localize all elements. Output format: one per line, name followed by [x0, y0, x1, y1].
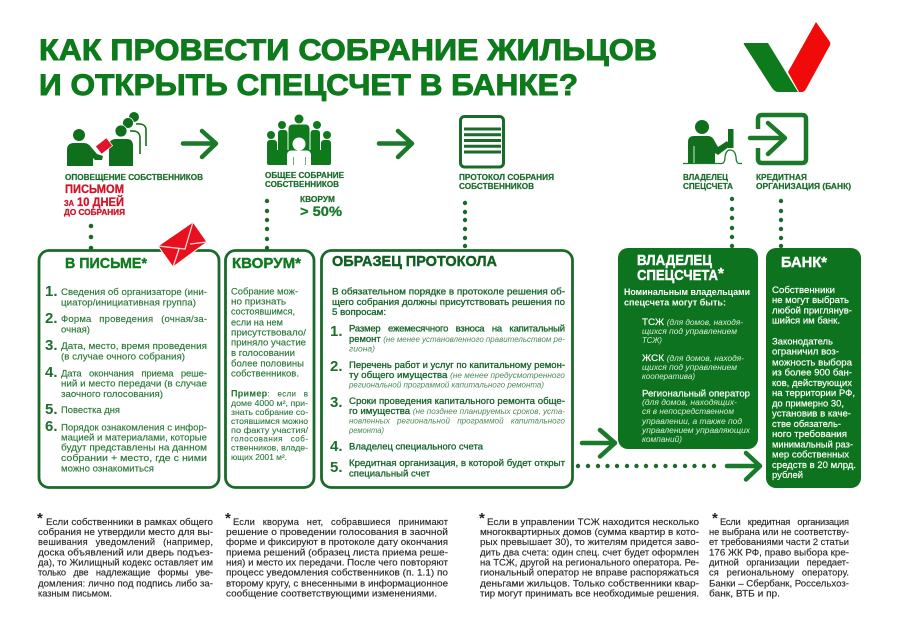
- footnote: account owner: гиональный оператор не вправе распоряжаться: [480, 568, 699, 578]
- footnote: bank: не выбрана или не соответству-: [709, 527, 849, 537]
- label: general meeting: [265, 171, 345, 189]
- list: letter contents: будут представлены на данном: [61, 443, 207, 454]
- footnote: letter: только две надлежащие формы уве-: [38, 568, 213, 578]
- footnote: account owner: Если в управлении ТСЖ находится несколько: [487, 517, 699, 527]
- list: letter contents: 4.: [45, 364, 58, 381]
- panel: account owner: [618, 248, 758, 449]
- text: nominal owners: управлением управляющих: [641, 426, 751, 435]
- list: letter contents: можно ознакомиться: [61, 463, 154, 474]
- icon: protocol document: [460, 116, 504, 167]
- text: bank requirements: можность выбора: [772, 357, 853, 368]
- label: account owner: [683, 173, 733, 191]
- footnote: bank: Банки – Сбербанк, Россельхоз-: [709, 578, 849, 588]
- panel: protocol sample: [322, 250, 572, 488]
- text: nominal owners: ТСЖ): [642, 336, 662, 345]
- text: bank requirements: на территории РФ,: [772, 388, 855, 399]
- heading: account owner: ВЛАДЕЛЕЦ: [637, 252, 712, 269]
- text: quorum rule: более половины: [231, 358, 304, 369]
- list: protocol questions: [330, 323, 566, 480]
- footnote: quorum: сообщение соответствующими изменениями.: [226, 588, 437, 598]
- title: [39, 34, 657, 102]
- text: bank requirements: [772, 285, 856, 481]
- text: nominal owners: (для домов, находящих-: [642, 398, 737, 407]
- label: protocol: [459, 173, 554, 191]
- label: bank: КРЕДИТНАЯ: [756, 173, 807, 182]
- text: nominal owners: кооператива): [642, 372, 695, 381]
- text: bank requirements: установив в каче-: [772, 408, 851, 419]
- label: protocol: ПРОТОКОЛ СОБРАНИЯ: [459, 173, 554, 182]
- footnote: bank: ет требованиями части 2 статьи: [709, 537, 849, 547]
- text: quorum rule: приняло участие: [231, 338, 306, 349]
- title: КАК ПРОВЕСТИ СОБРАНИЕ ЖИЛЬЦОВ: [39, 34, 657, 67]
- label: quorum over 50 percent: > 50%: [300, 203, 343, 219]
- footnote: bank: *: [712, 510, 718, 527]
- list: letter contents: 1.: [45, 283, 58, 300]
- list: protocol questions: 4.: [330, 438, 343, 455]
- list: protocol questions: ремонт (не менее установленного правительством ре-: [349, 334, 565, 345]
- list: letter contents: 3.: [45, 337, 58, 354]
- list: letter contents: Дата, место, время проведения: [61, 341, 207, 352]
- list: letter contents: заочного голосования): [61, 389, 163, 400]
- text: bank requirements: минимальный раз-: [772, 439, 853, 450]
- panel: bank: [766, 248, 861, 488]
- footnote: letter: да), то Жилищный кодекс оставляет им: [38, 557, 213, 567]
- text: bank requirements: до примерно 30,: [772, 398, 844, 409]
- footnote: quorum: приема решений (образец листа приема реше-: [226, 547, 448, 557]
- list: letter contents: циатор/инициативная группа): [61, 297, 196, 308]
- footnote: quorum: ния) и место их передачи. После чего повторяют: [226, 557, 449, 567]
- title: И ОТКРЫТЬ СПЕЦСЧЕТ В БАНКЕ?: [39, 69, 578, 102]
- text: bank requirements: стве обязатель-: [772, 419, 841, 430]
- icon: bank entrance: [750, 115, 806, 163]
- list: protocol questions: 5.: [330, 459, 343, 476]
- heading: account owner: *: [718, 265, 724, 282]
- list: protocol questions: го имущества (не позднее планируемых сроков, уста-: [349, 406, 565, 417]
- list: letter contents: Порядок ознакомления с инфор-: [61, 422, 207, 433]
- heading: protocol sample: ОБРАЗЕЦ ПРОТОКОЛА: [332, 253, 497, 270]
- list: letter contents: Форма проведения (очная/за-: [61, 314, 207, 325]
- label: account owner: ВЛАДЕЛЕЦ: [683, 173, 728, 182]
- list: protocol questions: гиона): [349, 344, 375, 354]
- heading: quorum: КВОРУМ*: [232, 255, 301, 272]
- heading: account owner: [637, 252, 724, 284]
- text: quorum rule: в голосовании: [231, 348, 295, 359]
- label: quorum over 50 percent: [300, 195, 343, 219]
- footnote: quorum: форме и фиксируют в протоколе дату окончания: [226, 537, 448, 547]
- footnote: letter: [37, 510, 213, 598]
- list: protocol questions: ту общего имущества (не менее предусмотренного: [349, 370, 566, 381]
- text: nominal owners: спецсчета могут быть:: [624, 298, 726, 308]
- footnote: quorum: решение о проведении голосования в заочной: [226, 527, 448, 537]
- footnote: bank: банк, ВТБ и пр.: [709, 588, 780, 598]
- label: notifying owners: 10 ДНЕЙ: [77, 196, 124, 209]
- icon: account owner: [683, 120, 742, 164]
- text: quorum example: по факту участия/: [231, 426, 309, 435]
- footnote: quorum: второму кругу, с внесенными в информационное: [226, 578, 448, 588]
- text: quorum example: ственников, владе-: [231, 444, 308, 452]
- text: quorum example: [231, 388, 309, 462]
- footnote: bank: [709, 510, 849, 598]
- list: protocol questions: 3.: [330, 394, 343, 411]
- text: nominal owners: щихся под управлением: [642, 363, 738, 372]
- list: protocol questions: ремонта): [348, 426, 384, 435]
- label: quorum over 50 percent: КВОРУМ: [300, 195, 335, 204]
- footnote: letter: вешивания уведомлений (например,: [38, 537, 213, 547]
- text: nominal owners: управлении, а также под: [641, 417, 743, 426]
- footnote: quorum: *: [225, 510, 231, 527]
- text: bank requirements: любой приглянув-: [772, 306, 852, 317]
- text: bank requirements: из более 900 бан-: [772, 368, 852, 379]
- text: bank requirements: ограничил воз-: [772, 347, 839, 358]
- label: notifying owners: ДО СОБРАНИЯ: [64, 208, 125, 217]
- list: letter contents: 2.: [45, 310, 58, 327]
- text: nominal owners: [624, 287, 751, 444]
- arrow: step 2 to 3: [379, 131, 412, 157]
- list: letter contents: Повестка дня: [61, 405, 120, 416]
- text: nominal owners: компаний): [642, 435, 682, 444]
- text: quorum rule: если на нем: [231, 317, 283, 328]
- footnote: account owner: на ТСЖ, другой на регионального оператора. Ре-: [480, 557, 699, 567]
- footnote: account owner: [479, 510, 699, 598]
- label: general meeting: СОБСТВЕННИКОВ: [265, 180, 339, 189]
- text: protocol intro: 5 вопросам:: [332, 307, 386, 318]
- text: protocol intro: щего собрания должны присутствовать решения по: [332, 297, 565, 308]
- list: letter contents: ний и место передачи (в случае: [61, 379, 207, 390]
- arrow: step 1 to 2: [183, 131, 216, 157]
- text: quorum rule: [231, 287, 306, 380]
- text: nominal owners: ся в непосредственном: [642, 407, 735, 416]
- list: letter contents: [45, 283, 207, 474]
- text: bank requirements: ков, действующих: [772, 378, 852, 389]
- footnote: account owner: деньгами жильцов. Только собственники квар-: [480, 578, 699, 588]
- text: quorum example: Пример: если в: [231, 388, 308, 398]
- arrow: dotted protocol to bank: [576, 453, 760, 480]
- text: quorum rule: присутствовало/: [231, 327, 306, 338]
- text: bank requirements: шийся им банк.: [772, 316, 840, 327]
- list: protocol questions: 2.: [330, 358, 343, 375]
- footnote: letter: собрания не утвердили место для вы-: [38, 527, 213, 537]
- text: bank requirements: мер собственных: [772, 450, 849, 461]
- panel: in the letter: [39, 250, 219, 488]
- text: quorum rule: собственников.: [231, 369, 299, 380]
- footnote: quorum: процесс уведомления собственников (п. 1.1) по: [226, 568, 448, 578]
- footnote: account owner: тир могут принимать все необходимые решения.: [480, 588, 699, 598]
- text: bank requirements: Собственники: [772, 285, 835, 296]
- text: quorum example: голосования соб-: [231, 434, 308, 444]
- list: protocol questions: специальный счет: [349, 468, 431, 480]
- footnote: quorum: Если кворума нет, собравшиеся принимают: [233, 517, 449, 527]
- footnote: account owner: рых превышает 30), то жителям придется заво-: [480, 537, 699, 547]
- text: protocol intro: В обязательном порядке в протоколе решения об-: [332, 286, 565, 298]
- label: notifying owners: [64, 173, 203, 217]
- list: protocol questions: новленных региональной программой капитального: [349, 416, 566, 426]
- text: nominal owners: ТСЖ (для домов, находя-: [642, 317, 743, 328]
- text: bank requirements: средств в 20 млрд.: [772, 460, 856, 471]
- list: protocol questions: региональной программой капитального ремонта): [348, 380, 544, 390]
- footnote: bank: ся региональному оператору.: [709, 568, 849, 578]
- list: protocol questions: Перечень работ и услуг по капитальному ремон-: [349, 360, 565, 371]
- list: letter contents: (в случае очного собрания): [61, 352, 185, 363]
- footnote: quorum: [225, 510, 449, 598]
- icon: general meeting: [267, 114, 331, 165]
- label: protocol: СОБСТВЕННИКОВ: [459, 182, 534, 191]
- text: quorum example: знать собрание со-: [231, 408, 308, 417]
- label: general meeting: ОБЩЕЕ СОБРАНИЕ: [265, 171, 345, 180]
- text: bank requirements: Законодатель: [772, 337, 833, 348]
- text: nominal owners: Региональный оператор: [642, 388, 750, 400]
- arrow: protocol to account owner: [582, 430, 615, 456]
- label: notifying owners: ЗА: [64, 199, 74, 208]
- text: bank requirements: ного требования: [772, 429, 847, 440]
- footnote: letter: казным письмом.: [38, 588, 112, 598]
- footnote: bank: дитной организации передает-: [709, 557, 849, 567]
- list: protocol questions: Размер ежемесячного взноса на капитальный: [349, 324, 565, 334]
- footnote: bank: Если кредитная организация: [720, 517, 849, 527]
- logo: check mark: [744, 22, 830, 92]
- label: bank: [756, 173, 851, 191]
- text: nominal owners: Номинальным владельцами: [624, 287, 750, 298]
- footnote: account owner: *: [479, 510, 485, 527]
- text: quorum rule: состоявшимся,: [231, 307, 295, 318]
- text: quorum example: стоявшимся можно: [231, 417, 309, 426]
- footnote: account owner: многоквартирных домов (сумма квартир в кото-: [480, 527, 699, 537]
- list: letter contents: мацией и материалами, которые: [61, 433, 207, 444]
- label: bank: ОРГАНИЗАЦИЯ (БАНК): [756, 182, 851, 191]
- text: nominal owners: щихся под управлением: [642, 327, 738, 336]
- heading: bank: БАНК*: [781, 254, 827, 271]
- text: quorum rule: но признать: [231, 297, 286, 308]
- list: letter contents: собрании + место, где с ними: [61, 453, 207, 464]
- footnote: letter: доска объявлений или дверь подъез-: [38, 547, 213, 557]
- footnote: letter: *: [37, 510, 43, 527]
- text: quorum rule: Собрание мож-: [231, 287, 298, 298]
- list: letter contents: 5.: [45, 401, 58, 418]
- panel: quorum: [226, 250, 314, 488]
- list: letter contents: Сведения об организаторе (ини-: [61, 287, 207, 298]
- heading: in the letter: В ПИСЬМЕ*: [65, 255, 147, 272]
- list: protocol questions: Сроки проведения капитального ремонта обще-: [349, 396, 565, 407]
- heading: account owner: СПЕЦСЧЕТА: [637, 267, 718, 284]
- text: quorum example: доме 4000 м², при-: [231, 399, 308, 408]
- label: account owner: СПЕЦСЧЕТА: [683, 182, 733, 191]
- label: notifying owners: ПИСЬМОМ: [65, 184, 124, 196]
- footnote: letter: Если собственники в рамках общего: [46, 517, 213, 527]
- label: notifying owners: ОПОВЕЩЕНИЕ СОБСТВЕННИКОВ: [65, 173, 203, 182]
- icon: notifying owners: [67, 112, 146, 166]
- list: protocol questions: Владелец специального счета: [349, 442, 484, 452]
- footnote: letter: домления: лично под подпись либо за-: [38, 578, 213, 588]
- footnote: account owner: дить два счета: один спец. счет будет оформлен: [480, 547, 699, 557]
- text: protocol intro: [332, 286, 565, 318]
- icon: red envelope: [158, 222, 207, 267]
- text: bank requirements: не могут выбрать: [772, 295, 849, 306]
- footnote: bank: 176 ЖК РФ, право выбора кре-: [709, 547, 849, 557]
- text: nominal owners: ЖСК (для домов, находя-: [642, 353, 744, 364]
- list: protocol questions: 1.: [330, 323, 343, 340]
- text: bank requirements: рублей: [772, 470, 803, 481]
- text: quorum example: ющих 2001 м².: [231, 453, 287, 462]
- list: protocol questions: Кредитная организация, в которой будет открыт: [349, 458, 566, 469]
- list: letter contents: 6.: [45, 418, 58, 435]
- list: letter contents: очная): [61, 324, 90, 335]
- list: letter contents: Дата окончания приема реше-: [61, 368, 207, 379]
